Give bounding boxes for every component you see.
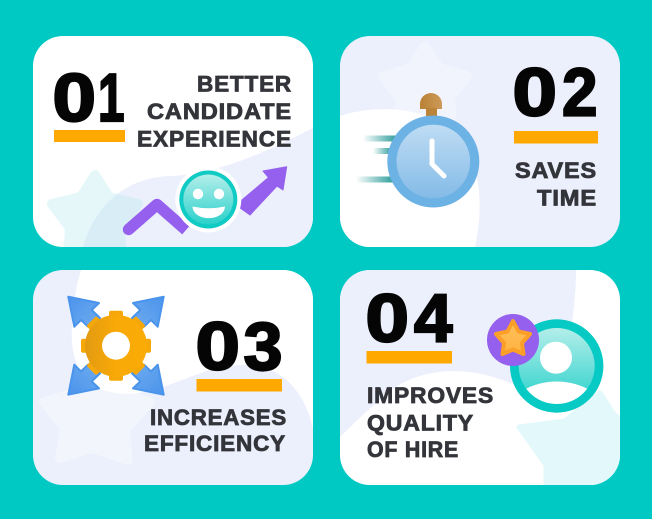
number 02: 2	[562, 54, 598, 130]
heading text: OF HIRE	[367, 437, 459, 462]
heading text	[367, 383, 494, 462]
heading text: INCREASES	[150, 405, 287, 430]
number 04: 4	[414, 280, 453, 356]
heading text: EFFICIENCY	[144, 431, 286, 456]
number 03: 0	[196, 308, 240, 384]
heading text	[144, 405, 287, 456]
number 04	[366, 280, 453, 356]
panel: 04 improves quality of hire	[340, 270, 621, 486]
icon: gear with outward arrows	[68, 297, 164, 395]
number 02	[512, 54, 598, 130]
number 02: 0	[512, 54, 557, 130]
icon: smiley on rising arrow	[123, 166, 287, 235]
orange bar	[196, 379, 282, 392]
heading text: EXPERIENCE	[137, 126, 292, 152]
panel: 01 better candidate experience	[33, 36, 313, 262]
number 04: 0	[366, 280, 409, 356]
number 01	[52, 60, 124, 136]
orange bar	[366, 351, 452, 364]
heading text: SAVES	[515, 158, 597, 183]
panel: 03 increases efficiency	[33, 270, 313, 485]
icon: profile with star badge	[487, 314, 604, 413]
heading text	[137, 72, 292, 152]
heading text: QUALITY	[367, 410, 474, 436]
orange bar	[514, 131, 598, 144]
icon: stopwatch	[356, 93, 479, 208]
orange bar	[54, 130, 125, 142]
heading text: TIME	[537, 186, 597, 210]
heading text: CANDIDATE	[147, 99, 292, 124]
heading text: BETTER	[197, 72, 292, 96]
number 01: 1	[98, 60, 124, 136]
number 03: 3	[244, 308, 282, 384]
heading text: IMPROVES	[367, 383, 494, 408]
heading text	[515, 158, 597, 210]
number 03	[196, 308, 282, 384]
number 01: 0	[52, 60, 96, 136]
panel: 02 saves time	[340, 36, 620, 247]
